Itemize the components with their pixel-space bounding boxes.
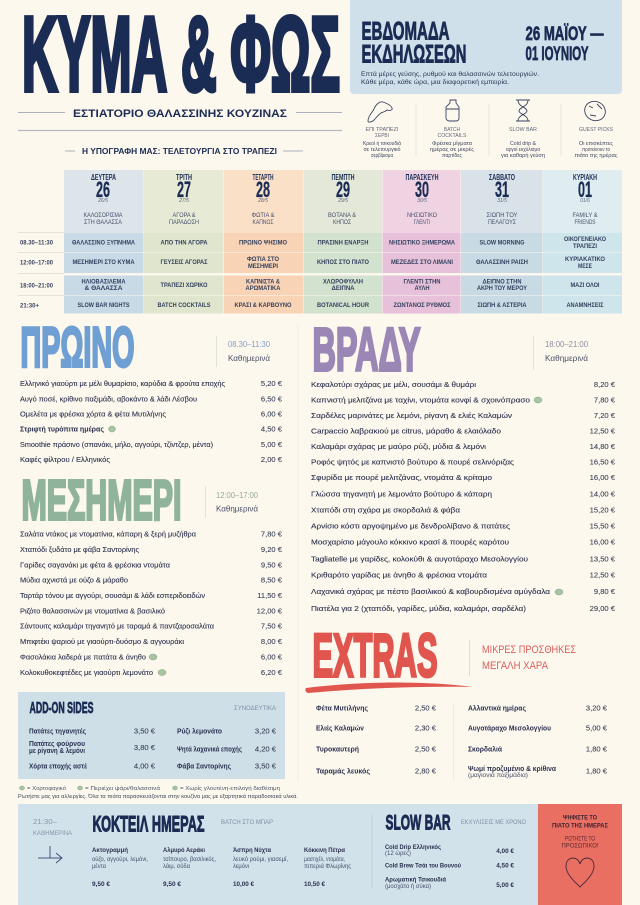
sides list: 3,50 € — [134, 726, 156, 736]
subtitle: restaurant tagline: ΕΣΤΙΑΤΟΡΙΟ ΘΑΛΑΣΣΙΝΗΣ ΚΟΥΖΙΝΑΣ — [73, 108, 287, 120]
column: Saturday: 31/5 — [497, 198, 507, 204]
lunch list: Ταρτάρ τόνου με αγγούρι, σουσάμι & λάδι εσπεριδοειδών — [20, 591, 205, 600]
cocktail 3 — [233, 847, 288, 888]
column: Saturday: ΘΑΛΑΣΣΙΝΗ ΡΑΙΣΗ — [476, 259, 528, 266]
column: Sunday: ΑΝΑΜΝΗΣΕΙΣ — [566, 302, 604, 309]
column: Friday: ΝΗΣΙΩΤΙΚΟ ΞΗΜΕΡΩΜΑ — [389, 239, 455, 246]
cocktail 4: μαστιχέλ, ντομάτα, — [304, 856, 345, 863]
cocktail 4 — [304, 847, 351, 888]
column: Wednesday: ΚΑΠΝΙΣΤΑ & — [246, 278, 280, 286]
label: batch at the bar: BATCH ΣΤΟ ΜΠΑΡ — [221, 819, 273, 826]
sides list: Χόρτα εποχής αστέ — [29, 762, 88, 770]
feature: slow bar: για καθαρή γεύση — [501, 152, 545, 159]
extras tagline — [470, 640, 576, 676]
dinner list: 12,50 € — [590, 426, 616, 436]
feature: table finish: σε τελετουργικό — [364, 146, 401, 153]
schedule header column backgrounds — [64, 170, 622, 233]
panel: dinner — [311, 316, 616, 613]
legend and allergy note: = Περιέχει ψάρι/θαλασσινά — [85, 785, 161, 792]
schedule table — [18, 170, 622, 314]
heading: slow bar: SLOW BAR — [386, 810, 451, 834]
column: Monday: ΜΕΣΗΜΕΡΙ ΣΤΟ ΚΥΜΑ — [72, 259, 135, 266]
breakfast list: Ομελέτα με φρέσκα χόρτα & φέτα Μυτιλήνης — [20, 410, 166, 418]
heading: lunch: ΜΕΣΗΜΕΡΙ — [22, 468, 181, 532]
extras list: Ψωμί προζυμένιο & κρίθινα — [468, 764, 556, 773]
column: Thursday: ΠΕΜΠΤΗ — [332, 173, 355, 182]
cocktail 2: 9,50 € — [163, 881, 181, 888]
column: Thursday: 29 — [336, 177, 350, 202]
column: Tuesday: ΑΠΟ ΤΗΝ ΑΓΟΡΑ — [160, 239, 208, 246]
brush stroke — [305, 683, 473, 693]
lunch list: Σάντουιτς καλαμάρι τηγανητό με ταραμά & παντζαροσαλάτα — [20, 622, 215, 630]
sides list: 4,20 € — [255, 744, 277, 754]
column: Thursday: ΔΕΙΠΝΑ — [332, 285, 355, 292]
extras list — [316, 704, 608, 780]
icon: bottle — [446, 100, 459, 121]
panel: lunch — [20, 468, 283, 677]
late hours: 21:30– — [33, 817, 58, 826]
lunch list: 12,00 € — [257, 606, 283, 616]
column: Wednesday: ΚΑΠΝΟΣ — [252, 219, 274, 226]
column: Saturday: ΔΕΙΠΝΟ ΣΤΗΝ — [482, 278, 522, 286]
cocktail 1 — [92, 847, 148, 888]
feature: guest picks: GUEST PICKS — [579, 127, 613, 133]
dinner list: 29,00 € — [590, 604, 616, 613]
breakfast list: Καφές φίλτρου / Ελληνικός — [20, 455, 110, 464]
feature: table finish: ΕΠΙ ΤΡΑΠΕΖΙ — [366, 127, 399, 133]
column: Wednesday: ΑΡΩΜΑΤΙΚΑ — [246, 285, 281, 292]
legend and allergy note: = Χορτοφαγικό — [27, 785, 66, 792]
dinner list: 14,00 € — [590, 490, 616, 498]
feature: slow bar: αργοί εκχύλισμα — [506, 146, 540, 153]
panel: events week — [350, 0, 622, 94]
extras tagline: ΜΙΚΡΕΣ ΠΡΟΣΘΗΚΕΣ — [482, 644, 576, 656]
dinner list: Tagliatelle με γαρίδες, κολοκύθι & αυγοτάραχο Μεσολογγίου — [311, 554, 528, 564]
cocktail 4: πιπεριά Φλωρίνης — [304, 863, 351, 870]
lunch hours: 12:00–17:00 — [216, 491, 259, 500]
column: Sunday: ΟΙΚΟΓΕΝΕΙΑΚΟ — [564, 236, 606, 243]
column: Wednesday: 28 — [256, 177, 270, 202]
column: Saturday: SLOW MORNING — [480, 239, 525, 246]
cocktail 3: 10,00 € — [233, 881, 254, 888]
intro text: Επτά μέρες γεύσης, ρυθμού και θαλασσινών τελετουργιών. — [361, 70, 539, 78]
lunch list: Χταπόδι ξυδάτο με φάβα Σαντορίνης — [20, 545, 139, 554]
column: Sunday: FAMILY & — [572, 212, 598, 219]
extras list: Αλλαντικά ημέρας — [468, 704, 526, 712]
dinner list — [311, 380, 616, 613]
dinner list: 15,20 € — [590, 506, 616, 514]
cocktail 3: Άσπρη Νύχτα — [233, 847, 271, 854]
dinner list: Πιατέλα για 2 (χταπόδι, γαρίδες, μύδια, καλαμάρι, σαρδέλα) — [311, 604, 526, 613]
sides list: Ρύζι λεμονάτο — [177, 726, 222, 736]
column: Thursday: BOTANICAL HOUR — [317, 302, 369, 309]
extras list: 2,30 € — [415, 724, 437, 732]
lunch hours: Καθημερινά — [216, 504, 258, 514]
slow bar list: Cold Brew Τσάι του Βουνού — [385, 862, 461, 870]
intro text: Κάθε μέρα, κάθε ώρα, μια διαφορετική εμπειρία. — [361, 78, 509, 86]
dinner list: 13,50 € — [590, 554, 616, 564]
column: Sunday: ΚΥΡΙΑΚΑΤΙΚΟ — [565, 256, 605, 263]
heading: signature ritual: Η ΥΠΟΓΡΑΦΗ ΜΑΣ: ΤΕΛΕΤΟΥΡΓΙΑ ΣΤΟ ΤΡΑΠΕΖΙ — [82, 146, 277, 156]
column: Monday: ΚΑΛΟΣΟΡΙΣΜΑ — [84, 212, 123, 219]
lunch list: 9,50 € — [261, 560, 283, 570]
heading: events week: ΕΚΔΗΛΩΣΕΩΝ — [362, 40, 466, 68]
slow bar list: 4,00 € — [496, 848, 514, 855]
heading: add-on sides: ADD-ON SIDES — [30, 700, 94, 717]
extras list: 5,00 € — [586, 724, 608, 732]
breakfast list: Αυγό ποσέ, κρίθινο παξιμάδι, αβοκάντο & λάδι Λέσβου — [20, 394, 197, 404]
legend and allergy note — [18, 785, 298, 800]
sides list: Ψητά λαχανικά εποχής — [177, 744, 242, 754]
column: Saturday: ΣΙΩΠΗ ΤΟΥ — [486, 212, 518, 219]
lunch list: Γαρίδες σαγανάκι με φέτα & φρέσκια ντομάτα — [20, 560, 171, 570]
sides list: Πατάτες τηγανητές — [29, 726, 86, 736]
column: Sunday: FRIENDS — [574, 219, 596, 226]
cocktail 2: λάιμ, σόδα — [163, 863, 190, 870]
breakfast list: Smoothie πράσινο (σπανάκι, μήλο, αγγούρι, τζίντζερ, μέντα) — [20, 440, 213, 449]
dinner list: Καλαμάρι σχάρας με μαύρο ρύζι, μύδια & λεμόνι — [311, 442, 486, 451]
column: Friday: ΑΥΛΗ — [414, 285, 430, 292]
vote text: ΠΙΑΤΟ ΤΗΣ ΗΜΕΡΑΣ — [552, 822, 608, 830]
heading: breakfast: ΠΡΩΙΝΟ — [20, 316, 134, 380]
extras list: Ταραμάς λευκός — [316, 766, 370, 776]
column: Thursday: ΚΗΠΟΣ — [333, 219, 351, 226]
dinner list: 12,50 € — [590, 570, 616, 580]
slow bar list: Αρωματική Τσικουδιά — [385, 876, 446, 884]
label: slow extractions: ΕΚΧΥΛΙΣΕΙΣ ΜΕ ΧΡΟΝΟ — [461, 819, 526, 826]
column: Wednesday: ΦΩΤΙΑ ΣΤΟ — [247, 256, 279, 263]
extras list: 2,80 € — [415, 766, 437, 776]
lunch list: Μπιφτέκι ψαριού με γιαούρτι-δυόσμο & αγγουράκι — [20, 637, 184, 646]
lunch list: 7,80 € — [261, 530, 283, 538]
feature: table finish: ΣΕΡΒΙ — [375, 133, 389, 139]
feature: guest picks: Οι επισκέπτες — [579, 140, 613, 147]
panel: ritual features — [363, 98, 618, 159]
breakfast list: Ελληνικό γιαούρτι με μέλι θυμαρίσιο, καρύδια & φρούτα εποχής — [20, 379, 225, 388]
column: Saturday: ΑΚΡΗ ΤΟΥ ΜΕΡΟΥ — [477, 285, 528, 292]
lunch list — [20, 530, 283, 677]
time labels: 21:30+ — [20, 302, 39, 310]
column: Thursday: ΠΡΑΣΙΝΗ ΕΝΑΡΞΗ — [318, 239, 369, 246]
lunch list: 9,20 € — [261, 545, 283, 554]
dinner list: Καπνιστή μελιτζάνα με ταχίνι, ντομάτα κονφί & σχοινόπρασο — [311, 396, 530, 404]
panel: add-on sides — [18, 692, 285, 779]
cocktail 4: Κόκκινη Πέτρα — [304, 847, 345, 854]
lunch list: 8,50 € — [261, 576, 283, 584]
sides list: Φάβα Σαντορίνης — [177, 762, 231, 770]
time labels: 18:00–21:00 — [20, 282, 53, 290]
column: Tuesday: ΤΡΙΤΗ — [176, 173, 192, 182]
dinner list: 15,50 € — [590, 522, 616, 530]
dinner list: Μοσχαρίσιο μάγουλο κόκκινο κρασί & πουρές καρότου — [311, 538, 509, 546]
extras list: (μαγιονιά παξιμάδια) — [468, 772, 528, 779]
heading: extras: EXTRAS — [312, 622, 438, 690]
column: Saturday: ΠΕΛΑΓΟΥΣ — [488, 219, 516, 226]
dinner list: 16,50 € — [590, 458, 616, 466]
column: Wednesday: ΜΕΣΗΜΕΡΙ — [248, 263, 278, 270]
column: Friday: ΠΑΡΑΣΚΕΥΗ — [406, 173, 439, 182]
dinner list: Σφυρίδα με πουρέ μελιτζάνας, ντομάτα & κρίταμο — [311, 473, 492, 482]
column: Friday: ΝΗΣΙΩΤΙΚΟ — [407, 212, 437, 219]
icon: fish on the table — [368, 102, 392, 122]
time labels: 12:00–17:00 — [20, 260, 53, 266]
dates: 26 ΜΑΪΟΥ — — [526, 22, 604, 45]
dinner list: 16,00 € — [590, 473, 616, 482]
column: Friday: ΓΛΕΝΤΙ — [414, 219, 430, 226]
late hours — [33, 817, 73, 837]
feature: table finish: Κρεοί ή τσικουδιά — [363, 140, 401, 147]
dinner list: 9,80 € — [594, 587, 616, 596]
breakfast list: 4,50 € — [261, 424, 283, 434]
feature: batch cocktails: BATCH — [444, 127, 460, 133]
breakfast list: Στριφτή τυρόπιτα ημέρας — [20, 424, 104, 434]
lunch list: 11,50 € — [257, 591, 283, 600]
sides list: 3,20 € — [255, 726, 277, 736]
extras list: Αυγοτάραχο Μεσολογγίου — [468, 724, 551, 732]
lunch list: Ριζότο θαλασσινών με ντοματίνια & βασιλικό — [20, 606, 165, 616]
dinner list: Χταπόδι στη σχάρα με σκορδαλιά & φάβα — [311, 506, 461, 514]
extras list: Ελιές Καλαμών — [316, 724, 364, 732]
column: Wednesday — [234, 173, 292, 309]
column: Wednesday: ΠΡΩΙΝΟ ΨΗΣΙΜΟ — [239, 239, 287, 246]
icon: plate — [581, 98, 609, 124]
dinner list: 7,20 € — [594, 411, 616, 420]
lunch list: 6,00 € — [261, 652, 283, 662]
icon: heart — [566, 858, 594, 887]
breakfast list: 5,20 € — [261, 379, 283, 388]
cocktail 3: λευκό ρούμι, γιασεμί, — [233, 856, 288, 863]
slow bar list — [385, 843, 514, 890]
vote text: ΨΗΦΙΣΤΕ ΤΟ — [563, 814, 597, 822]
cocktail 1: μέντα — [92, 863, 106, 870]
column: Thursday: ΚΗΠΟΣ ΣΤΟ ΠΙΑΤΟ — [317, 259, 369, 266]
vote text: ΡΩΤΗΣΤΕ ΤΟ — [565, 836, 595, 842]
cocktail 2: τσίπουρο, βασιλικός, — [163, 856, 216, 863]
cocktail 1: ούζο, αγγούρι, λεμόνι, — [92, 856, 148, 863]
feature: batch cocktails: Φρέσκα μίγματα — [432, 140, 472, 147]
lunch list: Κολοκυθοκεφτέδες με γιαούρτι λεμονάτο — [20, 668, 153, 677]
column: Monday: ΘΑΛΑΣΣΙΝΟ ΞΥΠΝΗΜΑ — [72, 239, 135, 246]
dinner list: Κεφαλοτύρι σχάρας με μέλι, σουσάμι & θυμάρι — [311, 380, 476, 389]
breakfast hours: Καθημερινά — [228, 354, 270, 363]
cocktail 2: Αλμυρό Αεράκι — [163, 847, 205, 854]
feature: slow bar: Cold drip & — [510, 141, 536, 147]
schedule row backgrounds — [64, 233, 622, 314]
panel: breakfast — [20, 316, 283, 464]
breakfast list: 6,00 € — [261, 410, 283, 418]
sides list: 4,00 € — [134, 762, 156, 770]
extras list: 2,50 € — [415, 704, 437, 712]
heading: events week: ΕΒΔΟΜΑΔΑ — [362, 18, 450, 46]
feature: slow bar — [501, 100, 545, 159]
column: Tuesday: BATCH COCKTAILS — [158, 302, 210, 309]
extras list: 3,20 € — [586, 704, 608, 712]
feature: guest picks — [574, 98, 618, 159]
dinner list: Κριθαρότο γαρίδας με άνηθο & φρέσκια ντομάτα — [311, 570, 488, 580]
intro text — [361, 70, 539, 86]
dinner list: 8,20 € — [594, 380, 616, 389]
sides list: Πατάτες φούρνου — [29, 739, 85, 748]
column: Wednesday: ΤΕΤΑΡΤΗ — [252, 173, 274, 182]
column: Thursday — [317, 173, 369, 309]
arrow — [38, 846, 62, 863]
sides list: 3,50 € — [255, 762, 277, 770]
column: Tuesday: 27/5 — [178, 198, 189, 204]
feature: guest picks: προτείνουν το — [582, 147, 610, 153]
column: Wednesday: 28/5 — [257, 198, 268, 204]
breakfast list: 2,00 € — [261, 455, 283, 464]
column: Monday: ΗΛΙΟΒΑΣΙΛΕΜΑ — [82, 278, 126, 286]
time labels: 08.30–11:30 — [20, 240, 53, 246]
cocktail 2 — [163, 847, 216, 888]
dinner hours: Καθημερινά — [545, 354, 588, 363]
column: Saturday: ΣΙΩΠΗ & ΑΣΤΕΡΙΑ — [478, 302, 527, 309]
column: Wednesday: ΦΩΤΙΑ & — [252, 212, 275, 219]
label: side dishes: ΣΥΝΟΔΕΥΤΙΚΑ — [234, 705, 277, 712]
vote text — [552, 814, 608, 850]
dinner list: 16,00 € — [590, 538, 616, 546]
column: Sunday — [564, 173, 606, 309]
column: Saturday: 31 — [495, 177, 509, 202]
column: Tuesday: ΑΓΟΡΑ & — [172, 212, 196, 219]
cocktail 4: 10,50 € — [304, 881, 325, 888]
sides list: με ρίγανη & λεμόνι — [29, 746, 85, 755]
column: Friday: 30 — [415, 177, 429, 202]
extras list: 2,50 € — [415, 744, 437, 754]
feature: table finish: σερβίρισμα — [371, 153, 393, 159]
icon: hourglass — [516, 100, 530, 121]
column: Thursday: ΒΟΤΑΝΑ & — [328, 212, 357, 219]
column: Sunday: ΚΥΡΙΑΚΗ — [573, 173, 597, 182]
breakfast hours — [216, 336, 271, 367]
breakfast list — [20, 379, 283, 464]
cocktail 1: 9,50 € — [92, 881, 110, 888]
time labels — [18, 232, 64, 310]
slow bar list: 5,00 € — [496, 882, 514, 889]
column: Saturday: ΣΑΒΒΑΤΟ — [489, 173, 515, 182]
dinner hours: 18:00–21:00 — [545, 340, 589, 349]
feature: slow bar: SLOW BAR — [509, 127, 537, 133]
column: Friday: 30/5 — [417, 198, 427, 204]
cocktail 3: λεμόνι — [233, 863, 250, 870]
panel: extras — [305, 622, 608, 780]
legend and allergy note: Ρωτήστε μας για αλλεργίες. Όλα τα πιάτα παρασκευάζονται στην κουζίνα μας με εξαρτητικά παραδοσιακά υλικά. — [18, 793, 298, 800]
extras list: Τυροκαυτερή — [316, 744, 359, 754]
panel: bottom bar — [18, 804, 538, 905]
column: Monday: 26/5 — [97, 198, 108, 204]
feature: batch cocktails — [430, 100, 474, 159]
column: Wednesday: ΚΡΑΣΙ & ΚΑΡΒΟΥΝΟ — [234, 302, 292, 309]
column: Monday: SLOW BAR NIGHTS — [78, 302, 130, 309]
column: Monday: & ΘΑΛΑΣΣΑ — [84, 285, 123, 292]
dates — [526, 22, 604, 65]
lunch list: Σαλάτα ντάκος με ντοματίνια, κάπαρη & ξερή μυζήθρα — [20, 530, 197, 538]
column: Friday — [389, 173, 455, 309]
lunch list: Φασολάκια λαδερά με πατάτα & άνηθο — [20, 652, 146, 662]
lunch list: 7,50 € — [261, 622, 283, 630]
column: Sunday: 01/6 — [580, 198, 590, 204]
panel: vote callout — [538, 804, 622, 905]
feature: batch cocktails: παρτίδες — [442, 153, 462, 159]
feature: table finish — [363, 102, 401, 159]
dinner list: Γλώσσα τηγανητή με λεμονάτο βούτυρο & κάπαρη — [311, 490, 492, 498]
column: Monday: ΣΤΗ ΘΑΛΑΣΣΑ — [84, 219, 123, 226]
column: Thursday: 29/5 — [337, 198, 348, 204]
feature: batch cocktails: COCKTAILS — [438, 133, 467, 139]
dinner list: 7,80 € — [594, 396, 616, 404]
column: Sunday: ΜΑΖΙ ΟΛΟΙ — [570, 282, 600, 289]
slow bar list: 4,50 € — [496, 862, 514, 870]
feature: batch cocktails: ημέρας σε μικρές — [430, 146, 474, 153]
cocktail 1: Ακτογραμμή — [92, 847, 128, 854]
column: Thursday: ΧΛΩΡΟΦΥΛΛΗ — [323, 278, 363, 286]
slow bar list: (μοσχάτο ή σύκα) — [385, 883, 431, 890]
column: Tuesday — [158, 173, 210, 309]
lunch hours — [206, 486, 259, 518]
column: Sunday: ΤΡΑΠΕΖΙ — [573, 243, 597, 250]
feature: guest picks: πιάτο της ημέρας — [574, 152, 618, 159]
column: Saturday — [476, 173, 528, 309]
column: Tuesday: ΠΑΡΑΔΟΣΗ — [169, 219, 199, 226]
dinner list: Ροφός ψητός με καπνιστό βούτυρο & πουρέ σελινόριζας — [311, 458, 514, 466]
column: Friday: ΜΕΖΕΔΕΣ ΣΤΟ ΛΙΜΑΝΙ — [391, 259, 453, 266]
breakfast hours: 08.30–11:30 — [228, 340, 271, 349]
legend and allergy note: = Χωρίς γλουτένη-επιλογή διαθέσιμη — [180, 785, 280, 792]
late hours: ΚΑΘΗΜΕΡΙΝΑ — [33, 830, 73, 837]
column: Sunday: 01 — [578, 177, 592, 202]
slow bar list: Cold Drip Ελληνικός — [385, 843, 442, 851]
dinner list: Αρνίσιο κόστι αργοψημένο με δενδρολίβανο & πατάτες — [311, 522, 510, 530]
breakfast list: 5,00 € — [261, 440, 283, 449]
sides list — [29, 726, 277, 770]
dinner hours — [534, 336, 589, 370]
heading: events week — [362, 18, 466, 68]
column: Friday: ΖΩΝΤΑΝΟΣ ΡΥΘΜΟΣ — [394, 302, 451, 309]
dinner list: Σαρδέλες μαρινάτες με λεμόνι, ρίγανη & ελιές Καλαμών — [311, 411, 512, 420]
extras list: 1,80 € — [586, 766, 608, 776]
dinner list: Λαχανικά σχάρας με πέστο βασιλικού & καβουρδισμένα αμύγδαλα — [311, 587, 551, 596]
dinner list: Carpaccio λαβρακιού με citrus, μάραθο & ελαιόλαδο — [311, 426, 501, 436]
dinner list: 14,80 € — [590, 442, 616, 451]
lunch list: 6,20 € — [261, 668, 283, 677]
column: Tuesday: 27 — [177, 177, 191, 202]
slow bar list: (12 ώρες) — [385, 851, 411, 857]
heading: cocktails: ΚΟΚΤΕΙΛ ΗΜΕΡΑΣ — [92, 812, 204, 836]
extras list: Φέτα Μυτιλήνης — [316, 704, 368, 712]
column: Monday — [72, 173, 135, 309]
lunch list: 8,00 € — [261, 637, 283, 646]
heading: dinner: ΒΡΑΔΥ — [312, 316, 420, 384]
column: Tuesday: ΤΡΑΠΕΖΙ ΧΩΡΙΚΟ — [160, 282, 208, 289]
column: Tuesday: ΓΕΥΣΕΙΣ ΑΓΟΡΑΣ — [160, 259, 208, 266]
sides list: 3,80 € — [134, 743, 156, 752]
column: Friday: ΓΛΕΝΤΙ ΣΤΗΝ — [404, 278, 441, 286]
column: Monday: ΔΕΥΤΕΡΑ — [91, 173, 116, 182]
extras tagline: ΜΕΓΑΛΗ ΧΑΡΑ — [482, 660, 549, 672]
extras list: 1,80 € — [586, 744, 608, 754]
lunch list: Μύδια αχνιστά με ούζο & μάραθο — [20, 576, 128, 584]
extras list: Σκορδαλιά — [468, 744, 502, 754]
column: Monday: 26 — [96, 177, 110, 202]
vote text: ΠΡΟΣΩΠΙΚΟ! — [562, 842, 599, 850]
column: Sunday: ΜΕΣΕ — [578, 263, 592, 270]
breakfast list: 6,50 € — [261, 394, 283, 404]
dates: 01 ΙΟΥΝΙΟΥ — [526, 43, 588, 65]
